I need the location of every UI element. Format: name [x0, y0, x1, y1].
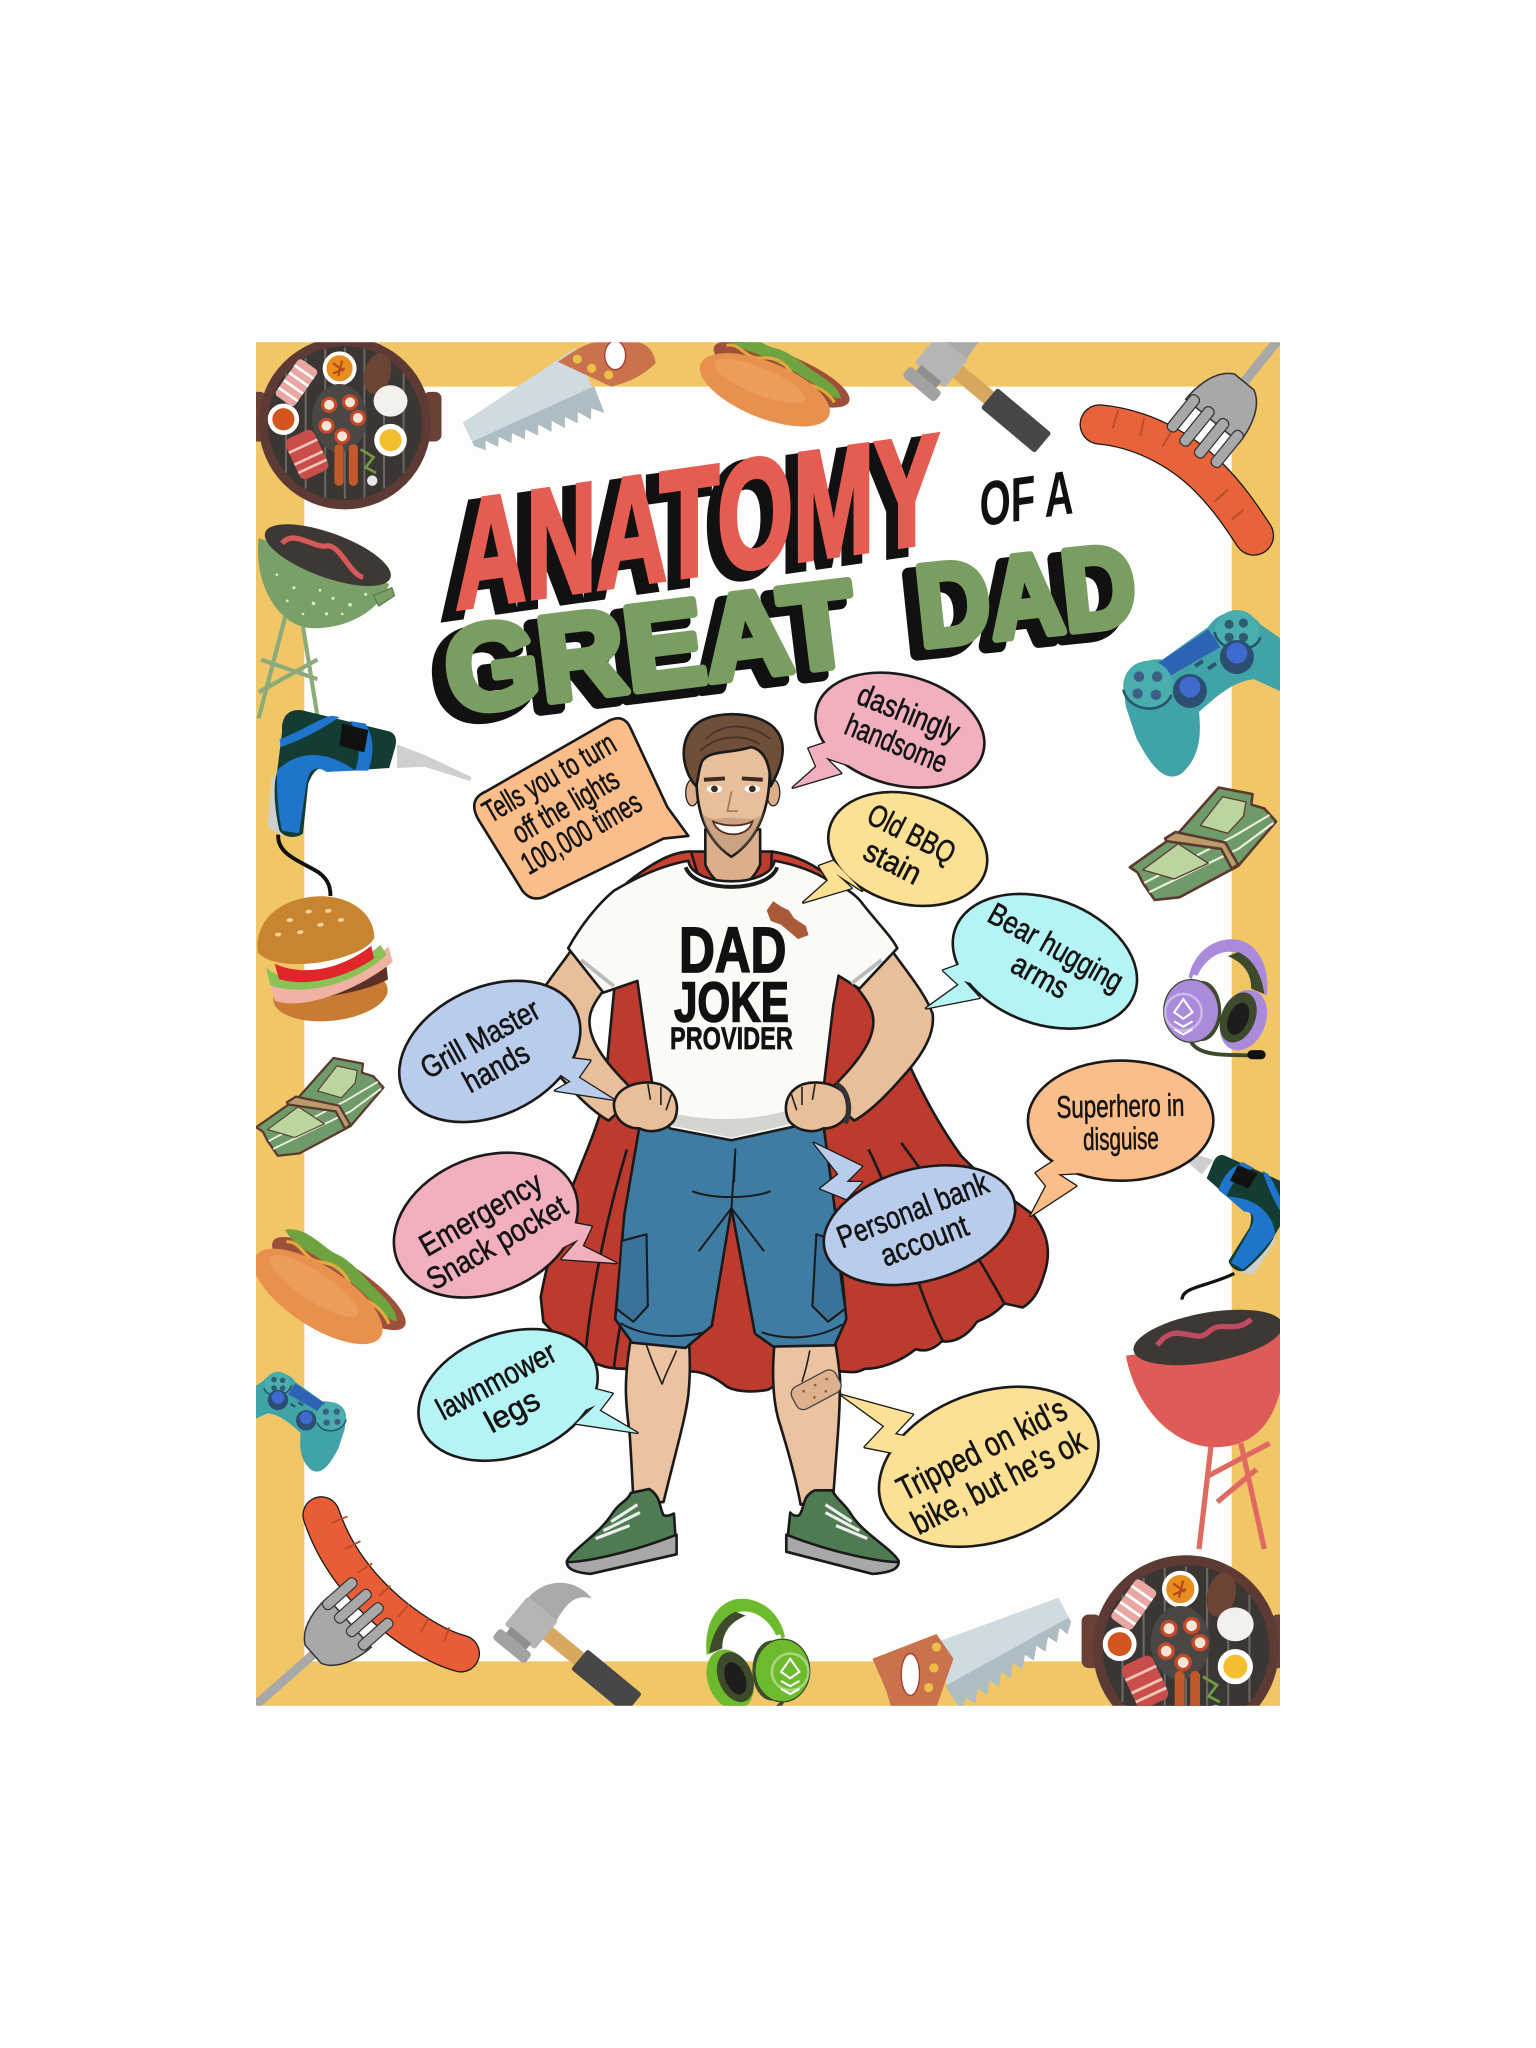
callout: personal bank account: [810, 1143, 1029, 1305]
t-shirt: [568, 861, 897, 1140]
callout: tripped on kid's bike: Tripped on kid's: [891, 1391, 1073, 1509]
title: ANATOMY: ANATOMY: [444, 408, 930, 648]
callout: dashingly handsome: [793, 655, 997, 805]
callout: emergency snack pocket: [372, 1126, 616, 1324]
callout: lawnmower legs: legs: [478, 1382, 546, 1440]
callout: emergency snack pocket: Snack pocket: [420, 1188, 574, 1297]
character: dad superhero: [530, 714, 1048, 1574]
callout: old BBQ stain: [803, 775, 1000, 923]
callout: tripped on kid's bike: [841, 1358, 1121, 1576]
icon: green headphones: [706, 1598, 810, 1706]
icon: saw top: [462, 342, 656, 450]
callout: personal bank account: Personal bank: [832, 1165, 994, 1255]
callout: bear hugging arms: arms: [1005, 946, 1075, 1006]
border of dad icons: [256, 342, 1280, 1706]
bandage: [788, 1367, 844, 1412]
icon: hot dog left: [256, 1229, 406, 1344]
callout: lawnmower legs: lawnmower: [430, 1335, 562, 1427]
callout: lights: 100,000 times: [515, 785, 648, 881]
callout: bear hugging arms: Bear hugging: [982, 896, 1129, 999]
icon: burger: [257, 896, 393, 1022]
callout: dashingly handsome: handsome: [840, 707, 953, 780]
icon: purple headphones: [1164, 939, 1276, 1059]
icon: round grill top-left: [248, 337, 441, 509]
title: OF A: OF A: [980, 457, 1074, 540]
yellow poster border: [256, 342, 1280, 1706]
title: DAD: DAD: [910, 521, 1142, 671]
icon: sausage on fork top-right: [1080, 342, 1280, 556]
callout: bear hugging arms: [926, 870, 1156, 1053]
title: GREAT: GREAT: [427, 564, 853, 747]
cape: [541, 852, 1048, 1391]
shorts: [615, 1121, 846, 1348]
icon: red kettle grill: [1126, 1300, 1287, 1549]
title: ANATOMY: [444, 401, 939, 648]
title: DAD: DAD: [899, 529, 1131, 679]
shirt text: DAD JOKE PROVIDER: DAD: [679, 914, 786, 986]
callout: lights: [474, 718, 688, 898]
icon: drill right: [1180, 1155, 1280, 1300]
bbq stain: [767, 901, 808, 939]
callout: lights: off the lights: [506, 761, 625, 850]
arms: [530, 951, 933, 1121]
icon: round grill bottom-right: [1082, 1555, 1280, 1706]
hands: [614, 1082, 849, 1131]
legs: [626, 1332, 844, 1505]
icon: sausage on fork bottom-left: [256, 1496, 480, 1706]
shirt text: DAD JOKE PROVIDER: PROVIDER: [670, 1021, 793, 1056]
callout: old BBQ stain: stain: [858, 833, 927, 892]
icon: drill left: [268, 710, 472, 896]
head: [684, 714, 783, 857]
icon: hammer top: [903, 342, 1050, 452]
icon: saw bottom: [872, 1598, 1072, 1706]
shoes: [567, 1489, 899, 1574]
callout: old BBQ stain: Old BBQ: [862, 797, 961, 871]
icon: cash left: [256, 1058, 383, 1156]
neck: [705, 829, 760, 887]
callout: superhero in disguise: disguise: [1083, 1121, 1159, 1157]
shirt text: DAD JOKE PROVIDER: [670, 914, 793, 1056]
icon: game controller right: [1123, 610, 1283, 777]
callout: lights: Tells you to turn: [477, 726, 622, 830]
title: GREAT: GREAT: [437, 556, 862, 739]
shirt text: DAD JOKE PROVIDER: JOKE: [674, 970, 789, 1033]
icon: green kettle grill: [258, 511, 398, 718]
icon: cash right: [1130, 788, 1276, 900]
callout: lawnmower legs: [400, 1306, 637, 1484]
callout: grill master hands: Grill Master: [415, 992, 546, 1086]
callout: superhero in disguise: Superhero in: [1056, 1088, 1185, 1125]
title: ANATOMY: ANATOMY: [456, 401, 939, 641]
callout: emergency snack pocket: Emergency: [413, 1165, 548, 1263]
callout: grill master hands: [376, 953, 614, 1150]
callout: grill master hands: hands: [457, 1035, 535, 1100]
callout: tripped on kid's bike: bike, but he's ok: [905, 1422, 1093, 1542]
white poster panel: [304, 387, 1232, 1661]
icon: hammer bottom: [493, 1582, 641, 1706]
icon: game controller left: [251, 1372, 346, 1472]
icon: hot dog top: [700, 342, 850, 426]
callout: personal bank account: account: [875, 1208, 974, 1273]
callout: dashingly handsome: dashingly: [852, 677, 965, 750]
callout: superhero in disguise: [1028, 1061, 1213, 1216]
